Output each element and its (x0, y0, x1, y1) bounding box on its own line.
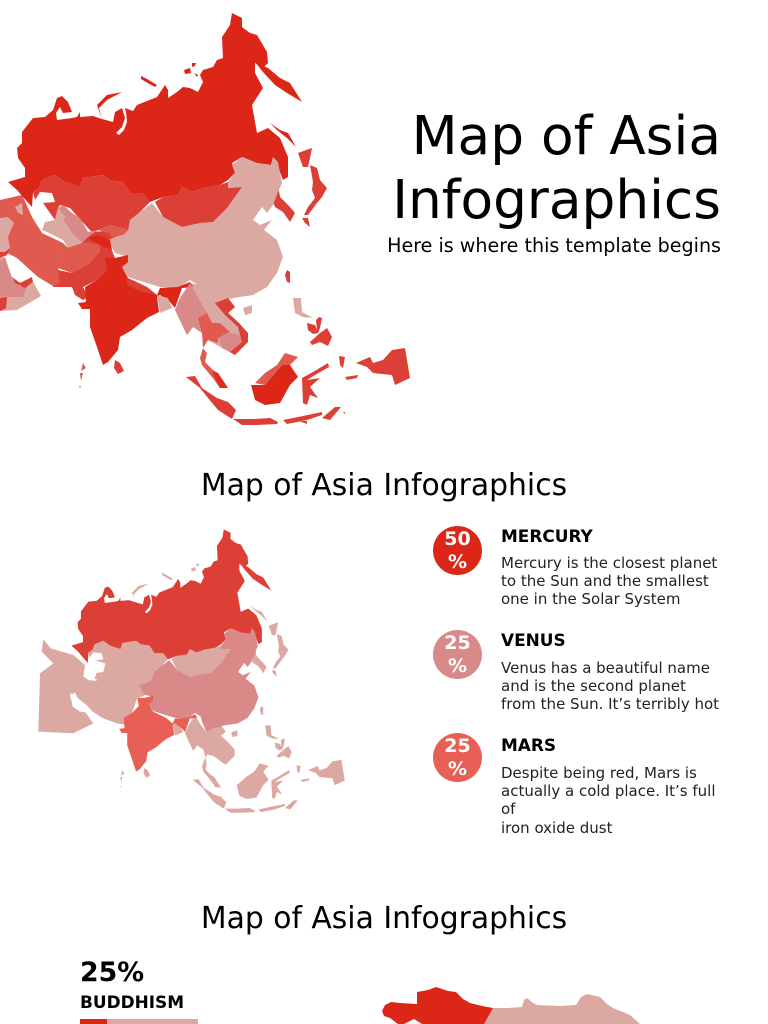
land underlays (0, 195, 248, 355)
Persian Gulf cut-out (70, 693, 87, 713)
Mercury description: to the Sun and the smallest (501, 572, 709, 590)
title: Infographics (392, 169, 721, 231)
Venus heading: VENUS (501, 630, 566, 650)
legend item: Mercury badge: % (448, 551, 467, 573)
Venus description (501, 659, 719, 713)
section heading: third panel: Map of Asia Infographics (201, 901, 567, 936)
legend item: Mercury badge (433, 526, 482, 575)
South Asia small countries (79, 278, 172, 388)
subtitle: Here is where this template begins (387, 234, 721, 257)
Venus description: Venus has a beautiful name (501, 659, 710, 677)
progress bar fill (80, 1019, 107, 1024)
Mercury description (501, 554, 717, 608)
statistic: 25 percent: 25% (80, 957, 144, 988)
Venus description: and is the second planet (501, 677, 686, 695)
Mars description: Despite being red, Mars is (501, 764, 697, 782)
light countries (71, 564, 345, 813)
section heading: second panel: Map of Asia Infographics (201, 468, 567, 503)
Mercury heading: MERCURY (501, 526, 593, 546)
highlighted country (382, 987, 502, 1024)
Indonesia, Philippines and Papua (186, 317, 410, 425)
Central Asia (42, 205, 128, 250)
India (78, 255, 193, 365)
legend item: Venus badge: 25 (444, 632, 471, 654)
progress bar (80, 1019, 198, 1024)
light countries (484, 994, 640, 1024)
Mercury description: Mercury is the closest planet (501, 554, 717, 572)
Middle East and South-West Asia (0, 195, 115, 311)
western Asia light area (38, 639, 98, 733)
Mars heading: MARS (501, 735, 556, 755)
legend item: Venus badge: % (448, 655, 467, 677)
Russia highlighted (71, 529, 271, 663)
legend item: Mars badge: 25 (444, 735, 471, 757)
Kamchatka and northern islands (97, 62, 302, 147)
Mongolia and Kazakhstan (33, 175, 242, 233)
legend item: Venus badge (433, 630, 482, 679)
Mars description (501, 764, 716, 837)
Mercury description: one in the Solar System (501, 590, 680, 608)
Mars description: iron oxide dust (501, 819, 612, 837)
Caspian sea cut-out (84, 652, 103, 681)
statistic label: BUDDHISM (80, 992, 184, 1012)
legend item: Mars badge (433, 733, 482, 782)
China (108, 157, 313, 318)
legend item: Mercury badge: 50 (444, 528, 471, 550)
Japan, Korea and Taiwan (273, 148, 327, 283)
title: Map of Asia (412, 105, 721, 167)
Mars description: of (501, 800, 515, 818)
India highlighted (119, 696, 197, 772)
South-East Asia mainland (175, 283, 248, 388)
China highlighted (139, 628, 258, 732)
legend item: Mars badge: % (448, 758, 467, 780)
Venus description: from the Sun. It’s terribly hot (501, 695, 719, 713)
Mars description: actually a cold place. It’s full (501, 782, 716, 800)
title (392, 105, 721, 231)
Russia (8, 13, 288, 207)
